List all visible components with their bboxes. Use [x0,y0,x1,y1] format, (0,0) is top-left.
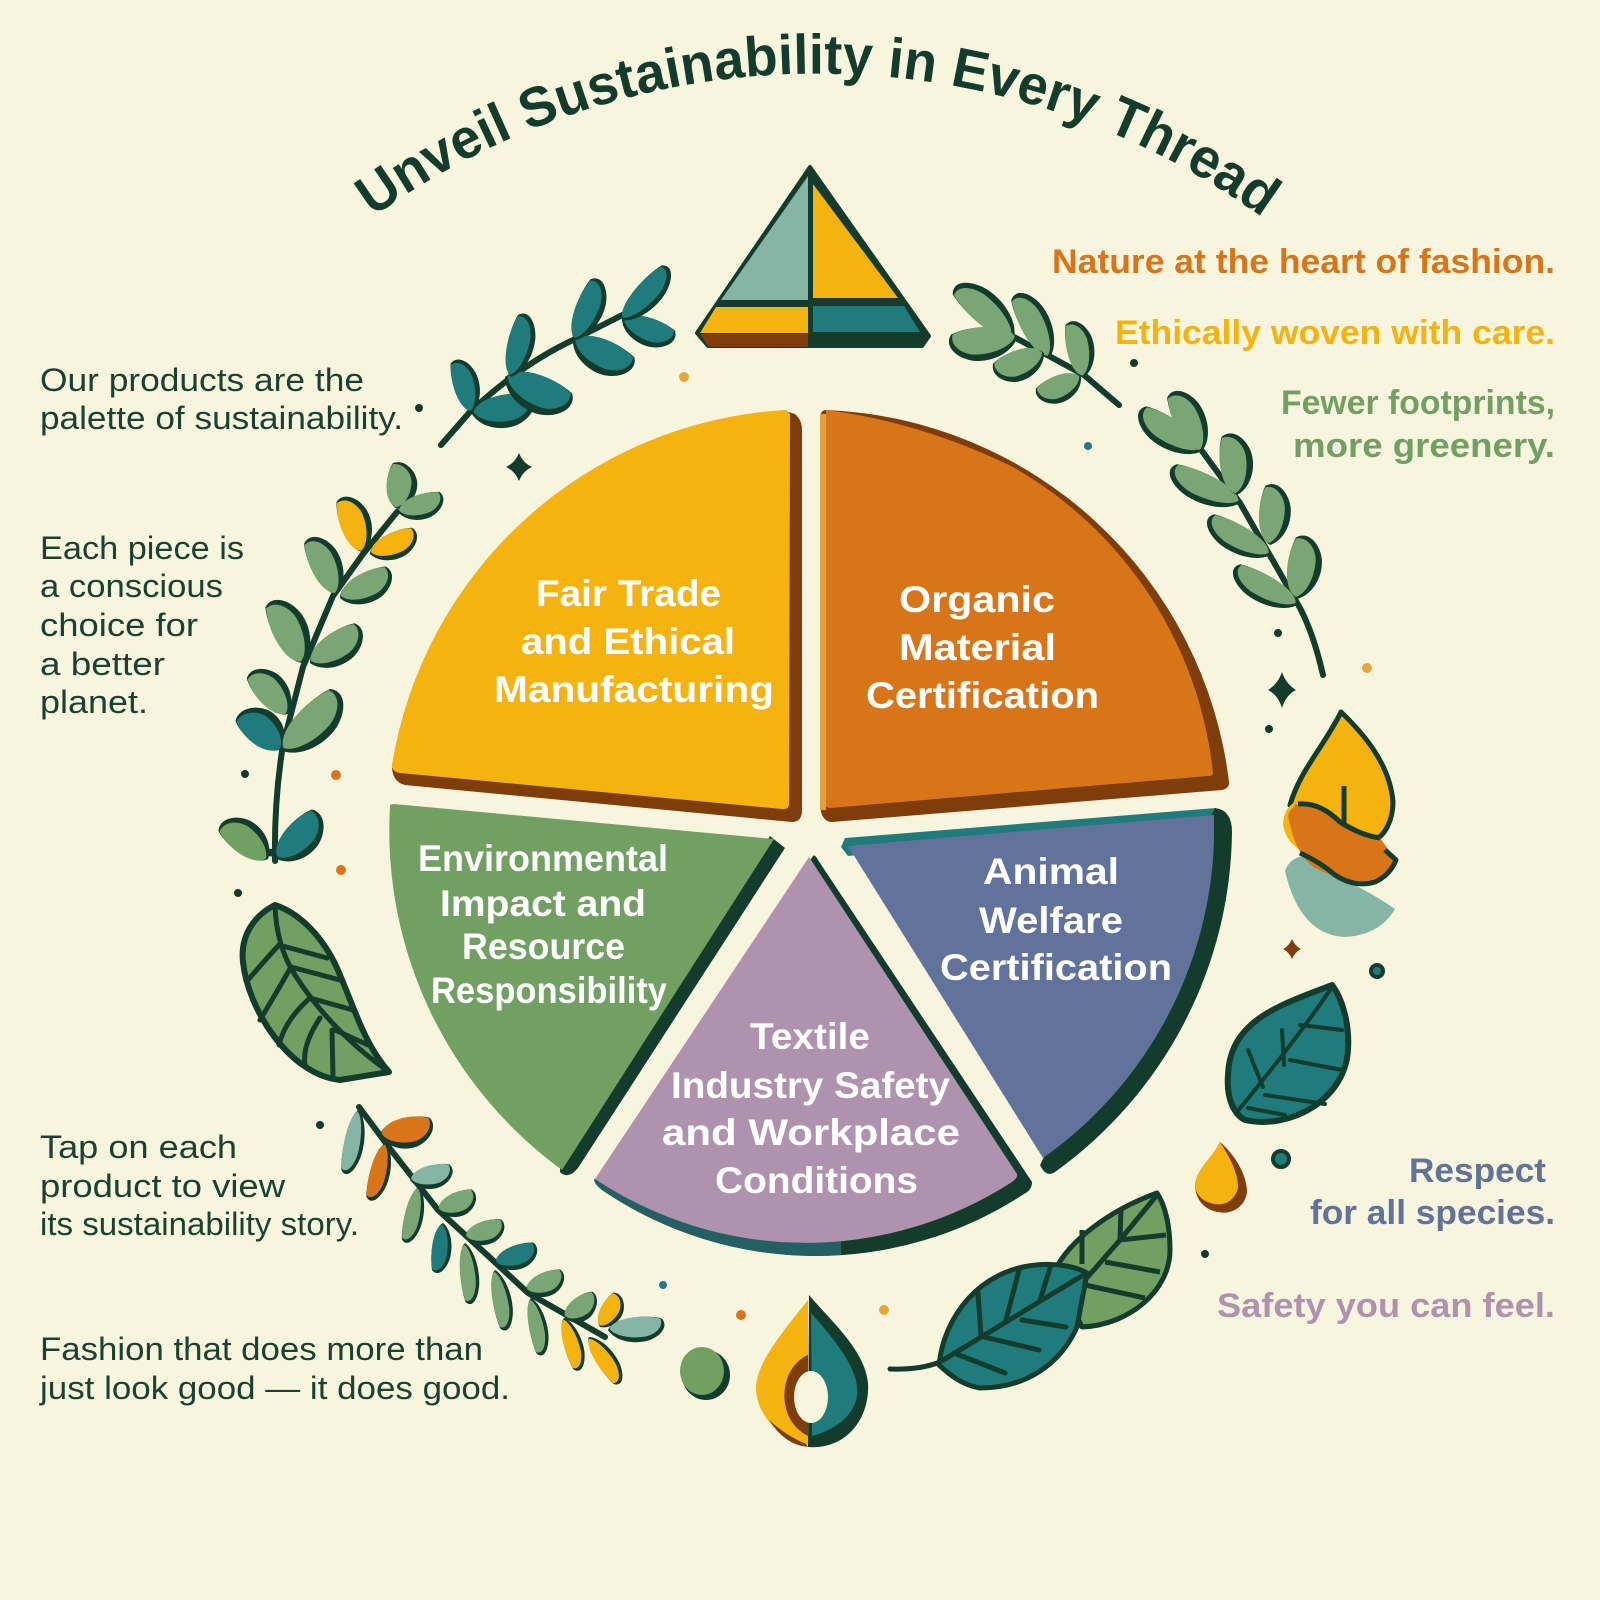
segment: animal welfare [841,808,1232,1174]
segment: textile safety: Conditions [715,1160,918,1201]
icon: triangle [697,167,929,347]
left text: does good: Fashion that does more than [40,1331,483,1367]
left text: conscious choice: choice for [40,607,198,643]
wheel [389,410,1232,1256]
sprig: right green [1130,384,1328,675]
left text: tap on each: Tap on each [40,1129,237,1165]
icon: large green leaf [243,905,389,1080]
left text: conscious choice: Each piece is [40,530,244,566]
right text: species [1310,1152,1555,1232]
left text: conscious choice: a conscious [40,568,223,604]
left text: conscious choice: planet. [40,684,148,720]
segment: environmental [389,804,785,1175]
segment: fair trade: and Ethical [521,621,735,662]
right text: footprints: Fewer footprints, [1281,384,1555,422]
segment: organic: Organic [899,579,1055,620]
left text: palette: palette of sustainability. [40,400,403,436]
left text: conscious choice [40,530,244,720]
right text: footprints: more greenery. [1293,427,1555,465]
sprig: left green [215,460,447,872]
left text: palette [40,362,403,436]
left text: tap on each: its sustainability story. [40,1206,359,1242]
right text: species: Respect [1409,1152,1546,1190]
right text: footprints [1281,384,1555,465]
left text: does good [39,1331,510,1406]
left text: tap on each [40,1129,359,1242]
left text: conscious choice: a better [40,646,165,682]
segment: animal welfare: Animal [983,851,1119,892]
segment: animal welfare: Welfare [979,900,1123,941]
decorative dots and sparkles [234,359,1383,1320]
sprig: bottom left [339,1107,664,1387]
segment: fair trade: Manufacturing [494,669,774,710]
segment: environmental: Resource [462,926,625,967]
icon: green ball [680,1347,730,1400]
right text: ethically: Ethically woven with care. [1115,314,1555,352]
left text: does good: just look good — it does good. [39,1370,510,1406]
icon: yellow and orange leaf [1283,712,1396,937]
segment: fair trade [392,410,802,822]
segment: organic [820,410,1229,822]
segment: textile safety: Industry Safety [671,1065,950,1106]
segment: environmental: Impact and [440,883,646,924]
icon: teal leaf [1228,985,1348,1122]
right text: species: for all species. [1310,1194,1555,1232]
right text: nature: Nature at the heart of fashion. [1052,243,1555,281]
left text: tap on each: product to view [40,1168,286,1204]
sprig: top left teal [441,261,681,445]
sprig: top right green [947,271,1119,412]
icon: water drop [756,1295,868,1447]
segment: organic: Certification [866,675,1099,716]
segment: textile safety: and Workplace [662,1112,960,1153]
segment: fair trade: Fair Trade [536,573,721,614]
icon: yellow drop [1195,1142,1247,1213]
right text: safety: Safety you can feel. [1217,1287,1555,1325]
left text: palette: Our products are the [40,362,364,398]
icon: twin leaf [890,1193,1170,1388]
segment: animal welfare: Certification [940,947,1172,988]
title: Unveil Sustainability in Every Thread [354,33,1283,216]
segment: environmental: Environmental [418,838,668,879]
segment: textile safety: Textile [750,1016,870,1057]
segment: organic: Material [899,627,1056,668]
segment: textile safety [594,856,1032,1256]
segment: environmental: Responsibility [431,970,667,1011]
